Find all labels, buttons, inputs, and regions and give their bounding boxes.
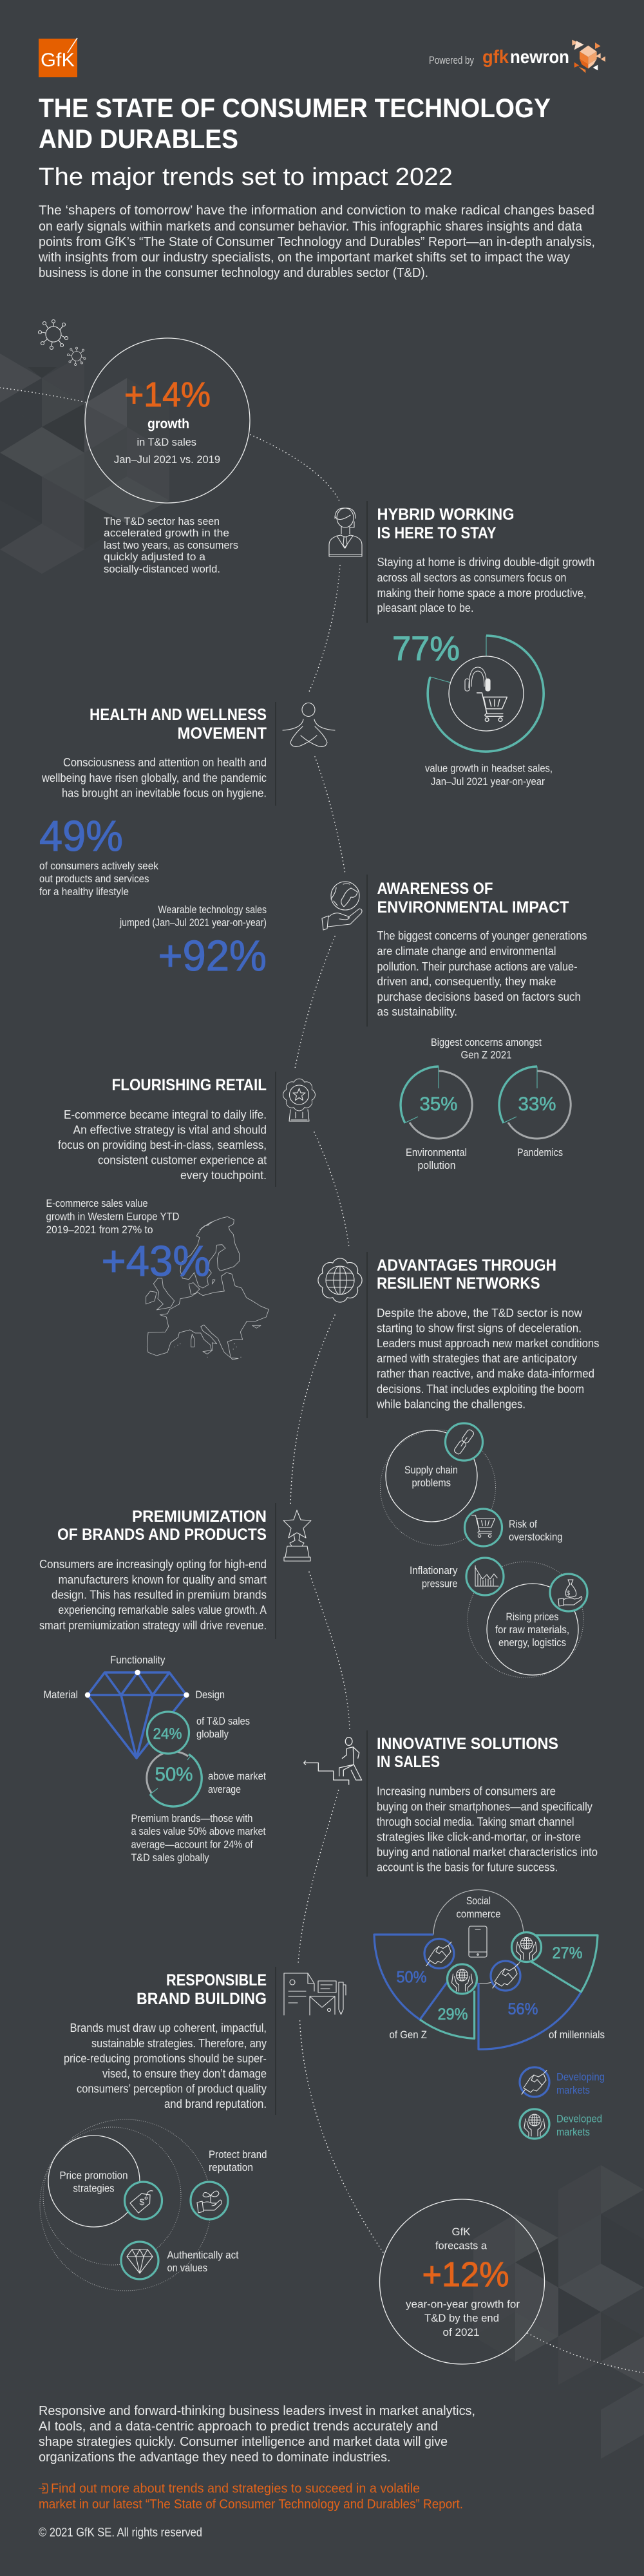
label: of T&D sales: of T&D sales (196, 1716, 250, 1727)
label: of T&D sales: globally (196, 1728, 229, 1740)
label: above market (208, 1771, 266, 1795)
text block: E-commerce became integral to daily life. (64, 1108, 267, 1121)
text block (376, 1306, 599, 1410)
label: rising prices (495, 1611, 569, 1649)
wedge: 29% developed Gen Z (420, 1991, 475, 2039)
icon: shopping cart (477, 693, 507, 721)
label: protect brand reputation (209, 2149, 267, 2174)
forecast details: of 2021 (443, 2327, 479, 2338)
text block: smart premiumization strategy will drive revenue. (39, 1618, 267, 1632)
text block: consumers’ perception of product quality (77, 2081, 267, 2096)
label: price promotion strategies: Price promotion (59, 2170, 128, 2182)
stat label: growth in Western Europe YTD (46, 1211, 180, 1222)
stat circle: 24%: 24% (153, 1725, 182, 1743)
label: authentically act on values (167, 2249, 239, 2274)
label: supply chain: problems (412, 1477, 451, 1489)
icon: trophy (283, 1510, 311, 1561)
heading: FLOURISHING RETAIL (112, 1076, 267, 1094)
text block: rather than reactive, and make data-informed (377, 1367, 594, 1380)
stat circle: 24% (147, 1712, 189, 1754)
heading: ENVIRONMENTAL IMPACT (377, 898, 569, 916)
stat label: growth (147, 417, 189, 431)
heading (377, 880, 569, 916)
stat: 50%: 50% (397, 1968, 426, 1986)
icon: price tag: $ (139, 2197, 144, 2207)
icon: price tag (125, 2182, 162, 2219)
intro text: points from GfK’s “The State of Consumer Technology and Durables” Report—an in-depth analysis, (39, 235, 595, 249)
text block: consistent customer experience at (98, 1153, 267, 1167)
caption: Premium brands—those with (131, 1813, 252, 1824)
icon: globe in hands (447, 1964, 477, 1994)
wedge: 27% developed millennials (530, 1935, 598, 1992)
closing text: Responsive and forward-thinking business leaders invest in market analytics, (39, 2404, 475, 2418)
label: protect brand reputation: Protect brand (209, 2149, 267, 2161)
title: THE STATE OF CONSUMER TECHNOLOGY (39, 93, 551, 123)
logo: powered by gfknewron: gfk (482, 47, 509, 68)
text block (377, 555, 595, 614)
label: functionality: Functionality (110, 1654, 166, 1666)
logo: GfK: GfK (41, 50, 75, 71)
text block: armed with strategies that are anticipatory (377, 1351, 578, 1365)
forecast lead-in: GfK (452, 2226, 470, 2238)
forecast details (406, 2299, 520, 2338)
legend: developing markets (520, 2067, 605, 2097)
title (39, 93, 551, 154)
heading: PREMIUMIZATION (132, 1508, 267, 1526)
callout circle (380, 2199, 545, 2364)
stat: +43%: +43% (102, 1237, 210, 1285)
closing text (39, 2404, 475, 2465)
text block: every touchpoint. (180, 1168, 267, 1182)
chart: ring 33% (499, 1066, 571, 1139)
map: Europe (146, 1217, 269, 1359)
label: material: Material (44, 1689, 78, 1701)
text block: decisions. That includes exploiting the boom (377, 1382, 584, 1396)
heading: HYBRID WORKING (377, 506, 514, 524)
heading: IS HERE TO STAY (377, 524, 497, 542)
label: pandemics: Pandemics (517, 1147, 563, 1159)
icon: smartphone (469, 1926, 487, 1957)
text block: making their home space a more productive, (377, 586, 586, 600)
stat label: 2019–2021 from 27% to (46, 1224, 153, 1236)
label: protect brand reputation: reputation (209, 2162, 253, 2174)
label: rising prices: energy, logistics (498, 1637, 566, 1649)
heading: RESPONSIBLE (166, 1971, 267, 1989)
legend: developed markets: Developed (556, 2114, 602, 2125)
chart: ring 50%: 50% (155, 1764, 193, 1785)
text block: and brand reputation. (164, 2097, 267, 2110)
heading (377, 1735, 558, 1771)
text block: The biggest concerns of younger generations (377, 929, 587, 942)
caption (131, 1813, 266, 1864)
text block: Despite the above, the T&D sector is now (377, 1306, 583, 1320)
forecast lead-in (435, 2226, 488, 2251)
stat: 49%: 49% (39, 812, 123, 860)
text block: quickly adjusted to a (104, 551, 206, 563)
icon: plant in hand (191, 2182, 228, 2219)
icon: person climbing stairs (304, 1738, 362, 1785)
text block: design. This has resulted in premium brands (52, 1588, 267, 1601)
intro text: business is done in the consumer technology and durables sector (T&D). (39, 266, 428, 280)
stat: 56%: 56% (507, 2000, 538, 2018)
label: of Gen Z: of Gen Z (389, 2029, 427, 2041)
legend: developed markets: markets (556, 2126, 590, 2138)
text block: Consumers are increasingly opting for high-end (39, 1557, 267, 1571)
text block: through social media. Taking smart channel (377, 1815, 574, 1828)
logo: powered by gfknewron: newron (510, 47, 569, 68)
label: social commerce (456, 1895, 501, 1920)
label: price promotion strategies: strategies (73, 2183, 115, 2195)
intro text: with insights from our industry specialists, on the important market shifts set to impact the way (38, 251, 570, 265)
background pattern: left triangles (0, 354, 169, 574)
text block: strategies like click-and-mortar, or in-store (377, 1830, 581, 1843)
text block (39, 1557, 267, 1632)
icon: money bag on hand: $ (567, 1590, 571, 1597)
label: of millennials: of millennials (549, 2029, 605, 2041)
text block: wellbeing have risen globally, and the pandemic (41, 771, 267, 784)
chart heading: Biggest concerns amongst (431, 1037, 542, 1048)
panel: resilient networks (318, 1252, 599, 1678)
text block: accelerated growth in the (104, 527, 229, 539)
text block: Leaders must approach new market conditions (377, 1336, 599, 1350)
text block: Brands must draw up coherent, impactful, (70, 2021, 267, 2034)
panel: innovative solutions (304, 1730, 605, 2139)
diagram: inflationary pressure and rising prices (410, 1558, 587, 1678)
caption: a sales value 50% above market (131, 1826, 266, 1837)
icon: person with headset (329, 508, 362, 556)
heading: RESILIENT NETWORKS (377, 1274, 540, 1293)
label: above market: average (208, 1784, 241, 1795)
text block: as sustainability. (377, 1005, 457, 1018)
heading: HEALTH AND WELLNESS (90, 706, 267, 724)
text block: price-reducing promotions should be super- (64, 2052, 267, 2065)
text block: last two years, as consumers (104, 540, 238, 551)
icon: gear with globe (318, 1258, 362, 1302)
label: authentically act on values: on values (167, 2262, 207, 2274)
chart: ring 35% (401, 1066, 472, 1139)
logo: powered by gfknewron (429, 40, 605, 73)
text block (104, 516, 238, 575)
panel: hybrid working (329, 501, 595, 788)
closing text: shape strategies quickly. Consumer intelligence and market data will give (39, 2435, 448, 2449)
stat: 29%: 29% (438, 2005, 468, 2023)
text block: buying on their smartphones—and specifically (377, 1799, 593, 1814)
stat: +12%: +12% (422, 2255, 509, 2294)
stat label: of consumers actively seek (39, 860, 159, 872)
header (38, 38, 605, 280)
icon: virus large (39, 319, 68, 349)
stat label: for a healthy lifestyle (39, 886, 129, 898)
chart heading: Gen Z 2021 (461, 1050, 511, 1061)
forecast details: T&D by the end (424, 2313, 499, 2324)
text block: Consciousness and attention on health and (63, 755, 267, 769)
text block: starting to show first signs of deceleration. (377, 1321, 582, 1334)
intro text: on early signals within markets and consumer behavior. This infographic shares insights and data (39, 220, 583, 234)
caption: T&D sales globally (131, 1852, 209, 1864)
stat label: Jan–Jul 2021 vs. 2019 (114, 454, 220, 466)
text block: has brought an inevitable focus on hygiene. (62, 786, 267, 800)
logo: GfK (39, 38, 77, 77)
icon: handshake (424, 1938, 454, 1968)
label: environmental pollution: pollution (417, 1160, 456, 1171)
text block: pleasant place to be. (377, 601, 474, 614)
text block: sustainable strategies. Therefore, any (91, 2036, 267, 2050)
chart heading (431, 1037, 542, 1061)
caption: Jan–Jul 2021 year-on-year (431, 776, 545, 788)
legend (520, 2067, 605, 2139)
label: of T&D sales (196, 1716, 250, 1740)
dotted timeline path (0, 388, 644, 2372)
panel: health and wellness (39, 702, 335, 980)
heading: BRAND BUILDING (137, 1990, 267, 2008)
text block: while balancing the challenges. (376, 1397, 526, 1410)
stat label (114, 417, 220, 466)
icon: chain (446, 1423, 483, 1461)
icon: headphones (465, 667, 490, 691)
text block (64, 2021, 267, 2110)
stat label: Wearable technology sales (158, 904, 267, 916)
icon: virus small (67, 347, 86, 366)
call to action text (39, 2482, 463, 2512)
label: supply chain (404, 1464, 458, 1489)
text block: manufacturers known for quality and smart (58, 1573, 267, 1586)
text block: Increasing numbers of consumers are (377, 1784, 556, 1798)
stat: 77%: 77% (392, 630, 460, 668)
subtitle: The major trends set to impact 2022 (39, 164, 453, 191)
chart: ring 77% headset sales (428, 636, 544, 752)
label: overstocking (509, 1519, 563, 1543)
chart: social commerce wedges (374, 1889, 605, 2049)
chart: ring 33%: 33% (518, 1094, 556, 1115)
panel: environmental impact (322, 875, 587, 1171)
call to action text: market in our latest “The State of Consumer Technology and Durables” Report. (39, 2497, 463, 2512)
icon: diamond (121, 2242, 158, 2279)
heading: INNOVATIVE SOLUTIONS (377, 1735, 558, 1753)
heading (57, 1508, 267, 1544)
label: rising prices: Rising prices (506, 1611, 559, 1623)
label: environmental pollution: Environmental (406, 1147, 467, 1159)
stat label: jumped (Jan–Jul 2021 year-on-year) (119, 917, 267, 929)
panel: responsible brand building (40, 1967, 346, 2291)
stat label (39, 860, 159, 898)
stat label: E-commerce sales value (46, 1198, 148, 1209)
callout circle (85, 338, 250, 503)
text block: experiencing remarkable sales value growth. A (58, 1603, 267, 1616)
stat label: out products and services (39, 873, 149, 885)
text block: Staying at home is driving double-digit growth (377, 555, 595, 569)
label: rising prices: for raw materials, (495, 1624, 569, 1636)
panel: flourishing retail (46, 1072, 315, 1359)
label: supply chain: Supply chain (404, 1464, 458, 1476)
icon: globe in hand (322, 882, 362, 930)
stat: +92%: +92% (158, 932, 267, 980)
panel: +14% growth (39, 319, 250, 575)
stat label (119, 904, 267, 929)
icon: award badge (283, 1079, 315, 1121)
heading (377, 1256, 556, 1293)
text block (377, 1784, 598, 1874)
caption: value growth in headset sales, (425, 762, 553, 774)
title: AND DURABLES (39, 124, 238, 154)
heading (90, 706, 267, 743)
intro text: The ‘shapers of tomorrow’ have the information and conviction to make radical changes based (39, 204, 594, 218)
heading: IN SALES (377, 1753, 440, 1771)
stat: 27%: 27% (553, 1944, 582, 1962)
icon: diamond (85, 1670, 189, 1758)
call to action text: Find out more about trends and strategies to succeed in a volatile (51, 2482, 420, 2496)
legend: developing markets: Developing (556, 2071, 605, 2083)
wedge: 50% developing Gen Z (374, 1935, 448, 2020)
text block: focus on providing best-in-class, seamless, (58, 1138, 267, 1151)
heading: AWARENESS OF (377, 880, 493, 898)
forecast details: year-on-year growth for (406, 2299, 520, 2311)
text block (58, 1108, 267, 1182)
text block: buying and national market characteristics into (377, 1845, 598, 1859)
label: inflationary pressure: Inflationary (410, 1565, 458, 1577)
label: overstocking: overstocking (509, 1531, 563, 1543)
heading: ADVANTAGES THROUGH (377, 1256, 556, 1274)
icon: cart (465, 1509, 502, 1546)
chart: ring 50% (147, 1752, 202, 1806)
legend: developing markets: markets (556, 2085, 590, 2096)
caption: average—account for 24% of (131, 1839, 253, 1851)
icon: falling chart (466, 1558, 504, 1595)
text block: socially-distanced world. (104, 564, 220, 575)
text block (41, 755, 267, 800)
call to action (39, 2482, 463, 2512)
label: authentically act on values: Authentically act (167, 2249, 239, 2261)
icon: arrow (39, 2484, 48, 2493)
heading: OF BRANDS AND PRODUCTS (57, 1526, 267, 1544)
panel: +12% forecast (380, 2199, 545, 2364)
caption (425, 762, 553, 788)
background pattern: right triangles (473, 2165, 644, 2459)
label: inflationary pressure: pressure (422, 1578, 457, 1589)
icon: meditating person (283, 703, 335, 746)
text block: vised, to ensure they don’t damage (102, 2067, 267, 2080)
panel: premiumization (39, 1503, 311, 1864)
closing text: organizations the advantage they need to dominate industries. (39, 2450, 390, 2465)
chart: ring 35%: 35% (420, 1094, 457, 1115)
text block: An effective strategy is vital and should (73, 1123, 267, 1136)
icon: handshake (491, 1961, 520, 1991)
logo: powered by gfknewron: Powered by (429, 54, 474, 66)
copyright: © 2021 GfK SE. All rights reserved (39, 2526, 202, 2540)
text block: The T&D sector has seen (104, 516, 220, 527)
label: overstocking: Risk of (509, 1519, 537, 1530)
text block (377, 929, 587, 1018)
label: price promotion strategies (59, 2170, 128, 2195)
label: social commerce: commerce (456, 1909, 501, 1920)
stat label (46, 1198, 180, 1236)
wedge: 56% developing millennials (478, 1983, 581, 2049)
text block: driven and, consequently, they make (377, 974, 556, 988)
heading (377, 506, 514, 542)
forecast lead-in: forecasts a (435, 2240, 488, 2251)
heading: MOVEMENT (178, 724, 267, 743)
stat label: in T&D sales (137, 437, 196, 448)
text block: are climate change and environmental (377, 944, 556, 958)
text block: across all sectors as consumers focus on (377, 571, 567, 584)
icon: money bag on hand (550, 1574, 587, 1611)
diagram: supply chain and overstocking (380, 1423, 563, 1546)
icon: documents and pen (284, 1973, 346, 2015)
label: design: Design (196, 1689, 225, 1701)
intro text (38, 204, 595, 280)
closing text: AI tools, and a data-centric approach to predict trends accurately and (39, 2420, 438, 2434)
icon: globe in hands (511, 1932, 541, 1962)
label: inflationary pressure (410, 1565, 458, 1589)
label: environmental pollution (406, 1147, 467, 1171)
text block: pollution. Their purchase actions are value- (377, 960, 577, 973)
label: social commerce: Social (466, 1895, 491, 1907)
text block: purchase decisions based on factors such (377, 990, 581, 1003)
legend: developed markets (520, 2109, 602, 2139)
stat: +14%: +14% (124, 375, 211, 414)
diagram: brand strategies (40, 2119, 267, 2291)
label: above market: above market (208, 1771, 266, 1783)
heading (137, 1971, 267, 2008)
text block: account is the basis for future success. (377, 1860, 558, 1874)
